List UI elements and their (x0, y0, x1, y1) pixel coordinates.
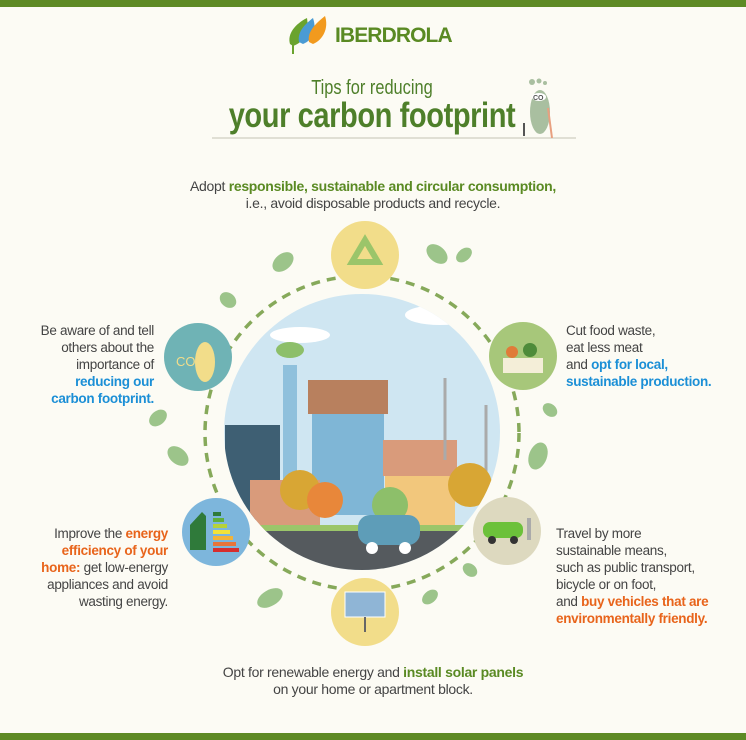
icon: energy label (182, 498, 250, 566)
text: food: Cut food waste, (566, 323, 655, 338)
icon: electric car (473, 497, 541, 565)
text: carbon footprint awareness: importance of (76, 357, 154, 372)
text: consumption (190, 178, 556, 211)
text: energy efficiency: appliances and avoid (47, 577, 168, 592)
text: consumption: i.e., avoid disposable products and recycle. (246, 195, 500, 211)
text: solar: on your home or apartment block. (273, 681, 473, 697)
city scene (220, 290, 510, 580)
text: solar: Opt for renewable energy and install solar panels (223, 664, 523, 680)
icon: footprint illustration: CO (533, 95, 544, 102)
title: Tips for reducing (311, 77, 433, 99)
text: energy efficiency: wasting energy. (79, 594, 168, 609)
bottom bar (0, 733, 746, 740)
central illustration (149, 221, 558, 646)
logo (289, 16, 452, 54)
text: energy efficiency: home: get low-energy (41, 560, 168, 575)
text: transport: and buy vehicles that are (556, 594, 708, 609)
text: carbon footprint awareness: others about the (61, 340, 154, 355)
text: carbon footprint awareness: carbon footprint. (51, 391, 154, 406)
text: food: sustainable production. (566, 374, 711, 389)
text: food: eat less meat (566, 340, 642, 355)
logo: IBERDROLA (335, 24, 452, 47)
top bar (0, 0, 746, 7)
leaves (146, 240, 560, 612)
icon: footprint illustration (523, 78, 553, 138)
text: carbon footprint awareness (41, 323, 154, 406)
title: your carbon footprint (229, 96, 515, 135)
text: solar (223, 664, 523, 697)
dashed ring (205, 276, 519, 590)
title (212, 77, 576, 139)
text: transport: environmentally friendly. (556, 611, 707, 626)
icon: CO2 footprint (164, 323, 232, 391)
text: energy efficiency (41, 526, 168, 609)
text: transport (556, 526, 708, 626)
text: food (566, 323, 711, 389)
text: consumption: Adopt responsible, sustainable and circular consumption, (190, 178, 556, 194)
text: carbon footprint awareness: reducing our (75, 374, 154, 389)
text: transport: bicycle or on foot, (556, 577, 656, 592)
icon: solar panel (331, 578, 399, 646)
text: food: and opt for local, (566, 357, 668, 372)
text: transport: such as public transport, (556, 560, 695, 575)
icon: food crate (489, 322, 557, 390)
icon: CO2 footprint: CO₂ (176, 354, 201, 369)
text: energy efficiency: Improve the energy (54, 526, 168, 541)
icon: recycle (331, 221, 399, 289)
text: energy efficiency: efficiency of your (62, 543, 168, 558)
text: transport: Travel by more (556, 526, 641, 541)
text: transport: sustainable means, (556, 543, 667, 558)
text: carbon footprint awareness: Be aware of and tell (41, 323, 154, 338)
